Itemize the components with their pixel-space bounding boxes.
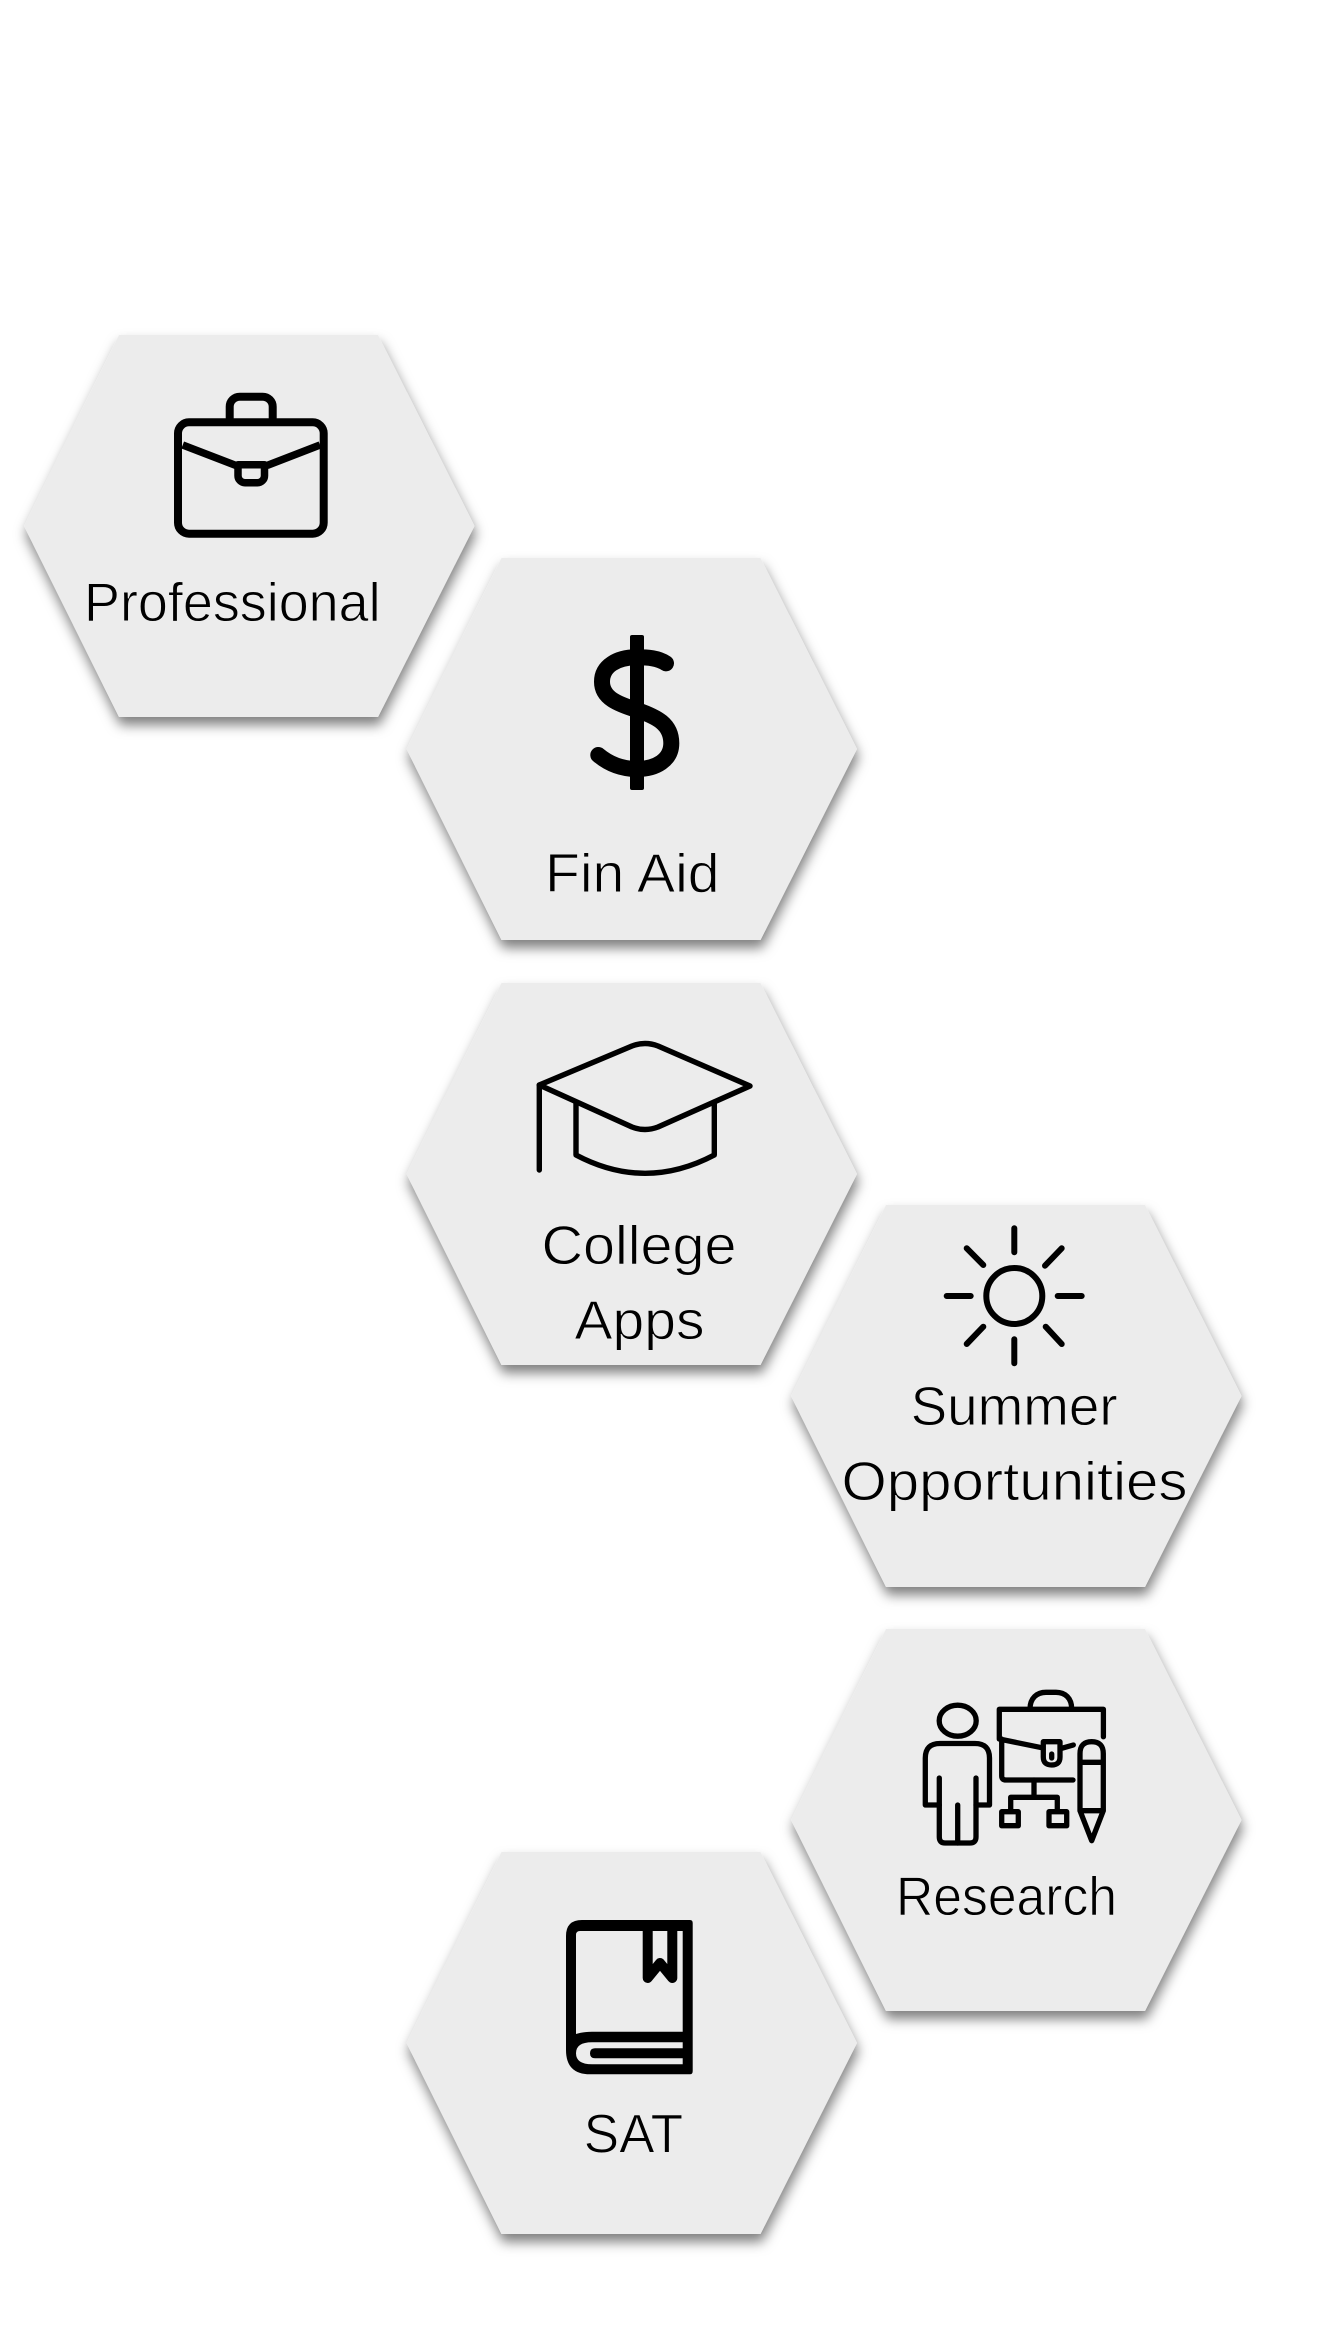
label: College Apps: Apps <box>574 1290 704 1351</box>
label: Professional: Professional <box>84 572 381 633</box>
label: Summer Opportunities: Opportunities <box>842 1451 1188 1512</box>
label: Summer Opportunities: Summer <box>911 1376 1118 1437</box>
hexagon: Research <box>791 1629 1242 2011</box>
label: Summer Opportunities <box>842 1376 1188 1512</box>
icon: briefcase <box>178 397 324 534</box>
hexagon: Fin Aid <box>406 558 857 940</box>
icon: graduation cap <box>539 1044 750 1173</box>
label: College Apps: College <box>542 1215 736 1276</box>
hexagon: Summer Opportunities <box>791 1205 1242 1587</box>
icon: sun <box>947 1228 1082 1363</box>
label: College Apps <box>542 1215 736 1351</box>
panel: Fin Aid <box>406 558 857 940</box>
panel: SAT <box>406 1852 857 2234</box>
label: Research: Research <box>896 1866 1117 1927</box>
panel: College Apps <box>406 983 857 1365</box>
label: SAT: SAT <box>584 2104 683 2164</box>
icon: book <box>566 1920 693 2074</box>
panel: Research <box>791 1629 1242 2011</box>
hexagon: Professional <box>24 335 474 717</box>
label: Fin Aid: Fin Aid <box>545 843 720 904</box>
panel: Professional <box>24 335 474 717</box>
icon: person with briefcase and pencil <box>925 1692 1103 1843</box>
hexagon: SAT <box>406 1852 857 2234</box>
hexagon: College Apps <box>406 983 857 1365</box>
panel: Summer Opportunities <box>791 1205 1242 1587</box>
icon: dollar sign <box>598 635 671 790</box>
